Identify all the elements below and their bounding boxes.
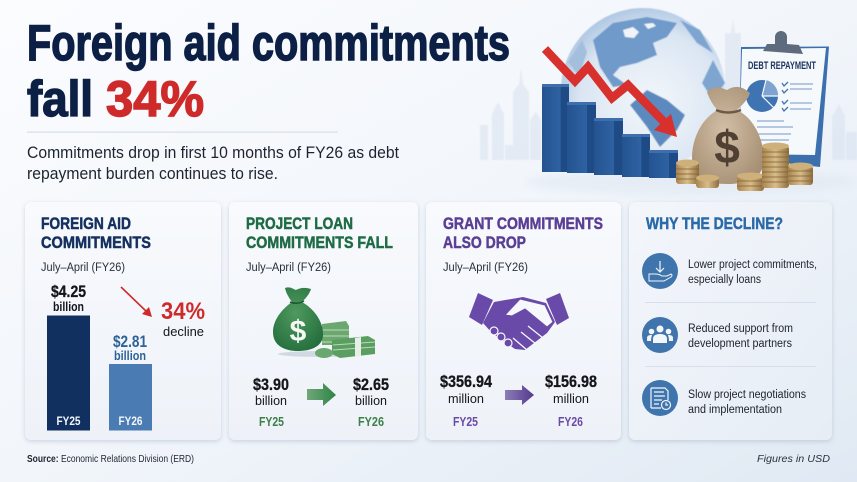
- FY26 value: [113, 332, 147, 363]
- red down arrow: [545, 49, 677, 137]
- icon: hand receiving: [642, 253, 678, 289]
- bar: FY26: FY26: [118, 414, 143, 428]
- FY26 value: [545, 372, 597, 406]
- reason: reduced support: [642, 317, 793, 353]
- burlap money bag: [692, 87, 764, 184]
- title: 34%: [106, 71, 204, 127]
- arrow: grants: [505, 385, 534, 405]
- dollar sign: $: [714, 121, 740, 173]
- reason text: Slow project negotiations: [688, 389, 806, 401]
- subtitle: repayment burden continues to rise.: [27, 164, 278, 183]
- period: July–April (FY26): [443, 262, 528, 274]
- reason: slow negotiations: [642, 380, 806, 416]
- FY25 value: $4.25: [51, 282, 86, 301]
- reason text: Reduced support from: [688, 323, 793, 335]
- reason text: [688, 389, 806, 416]
- bar: FY25: FY25: [56, 414, 81, 428]
- floor glow: [525, 169, 855, 195]
- reason text: [688, 323, 793, 350]
- reason text: and implementation: [688, 404, 782, 416]
- year labels: FY25: [453, 414, 478, 429]
- icon: document with clock: [642, 380, 678, 416]
- heading: PROJECT LOAN: [246, 214, 353, 233]
- period: July–April (FY26): [41, 262, 125, 274]
- FY26 value: million: [553, 391, 589, 406]
- checklist: [757, 84, 813, 147]
- title: [27, 15, 510, 127]
- year labels: [259, 414, 384, 429]
- callout: 34% decline: 34%: [161, 298, 205, 325]
- FY26 value: $156.98: [545, 372, 597, 391]
- arrow: decline: [121, 287, 152, 317]
- FY26 value: $2.65: [353, 375, 389, 394]
- reason: lower project commitments: [642, 253, 817, 289]
- FY25 value: [440, 372, 492, 406]
- FY25 value: [253, 375, 289, 408]
- illustration: skyline, globe, falling bars, debt clipboard and money bag: [480, 8, 857, 195]
- FY25 value: million: [448, 391, 484, 406]
- background skyline: [480, 19, 857, 160]
- heading: COMMITMENTS FALL: [246, 233, 393, 252]
- bar: FY25: [47, 316, 90, 430]
- heading: COMMITMENTS: [41, 233, 151, 252]
- reason text: Lower project commitments,: [688, 259, 817, 271]
- panel: foreign aid commitments: [25, 202, 221, 440]
- year labels: [453, 414, 583, 429]
- title: fall: [27, 71, 93, 127]
- callout: 34% decline: [161, 298, 205, 339]
- arrow: project loans: [307, 383, 336, 406]
- period: July–April (FY26): [246, 262, 331, 274]
- source note: Source: Economic Relations Division (ERD): [27, 453, 194, 465]
- units note: Figures in USD: [757, 453, 830, 465]
- year labels: FY25: [259, 414, 284, 429]
- subtitle: Commitments drop in first 10 months of FY26 as debt: [27, 143, 399, 162]
- FY26 value: billion: [355, 393, 387, 408]
- FY26 value: billion: [114, 348, 146, 363]
- heading: WHY THE DECLINE?: [646, 214, 783, 233]
- title: Foreign aid commitments: [27, 15, 510, 71]
- year labels: FY26: [358, 414, 384, 429]
- heading: [443, 214, 603, 252]
- heading: GRANT COMMITMENTS: [443, 214, 603, 233]
- heading: [41, 214, 151, 252]
- FY25 value: billion: [53, 299, 84, 314]
- FY25 value: $356.94: [440, 372, 492, 391]
- reason text: especially loans: [688, 274, 761, 286]
- heading: ALSO DROP: [443, 233, 526, 252]
- coin stacks: [676, 142, 813, 191]
- icon: handshake: [469, 293, 569, 350]
- panel: project loan commitments: [229, 202, 418, 440]
- FY25 value: [51, 282, 86, 314]
- bar: FY26: [109, 364, 152, 430]
- icon: green money bag with cash: $: [290, 315, 307, 348]
- FY26 value: [353, 375, 389, 408]
- icon: green money bag with cash: [273, 287, 375, 358]
- FY26 value: $2.81: [113, 332, 147, 351]
- year labels: FY26: [558, 414, 583, 429]
- pie chart: [746, 80, 778, 112]
- clipboard: debt repayment: [739, 31, 829, 167]
- panel: grant commitments: [426, 202, 621, 440]
- reason text: development partners: [688, 338, 792, 350]
- FY25 value: billion: [255, 393, 287, 408]
- panel: why the decline: [629, 202, 832, 440]
- reason text: [688, 259, 817, 286]
- clipboard label: DEBT REPAYMENT: [748, 60, 816, 72]
- heading: FOREIGN AID: [41, 214, 131, 233]
- icon: people: [642, 317, 678, 353]
- subtitle: [27, 143, 399, 183]
- descending bar chart: [542, 84, 678, 178]
- globe: [561, 8, 725, 172]
- callout: 34% decline: decline: [163, 324, 204, 339]
- heading: [246, 214, 393, 252]
- FY25 value: $3.90: [253, 375, 289, 394]
